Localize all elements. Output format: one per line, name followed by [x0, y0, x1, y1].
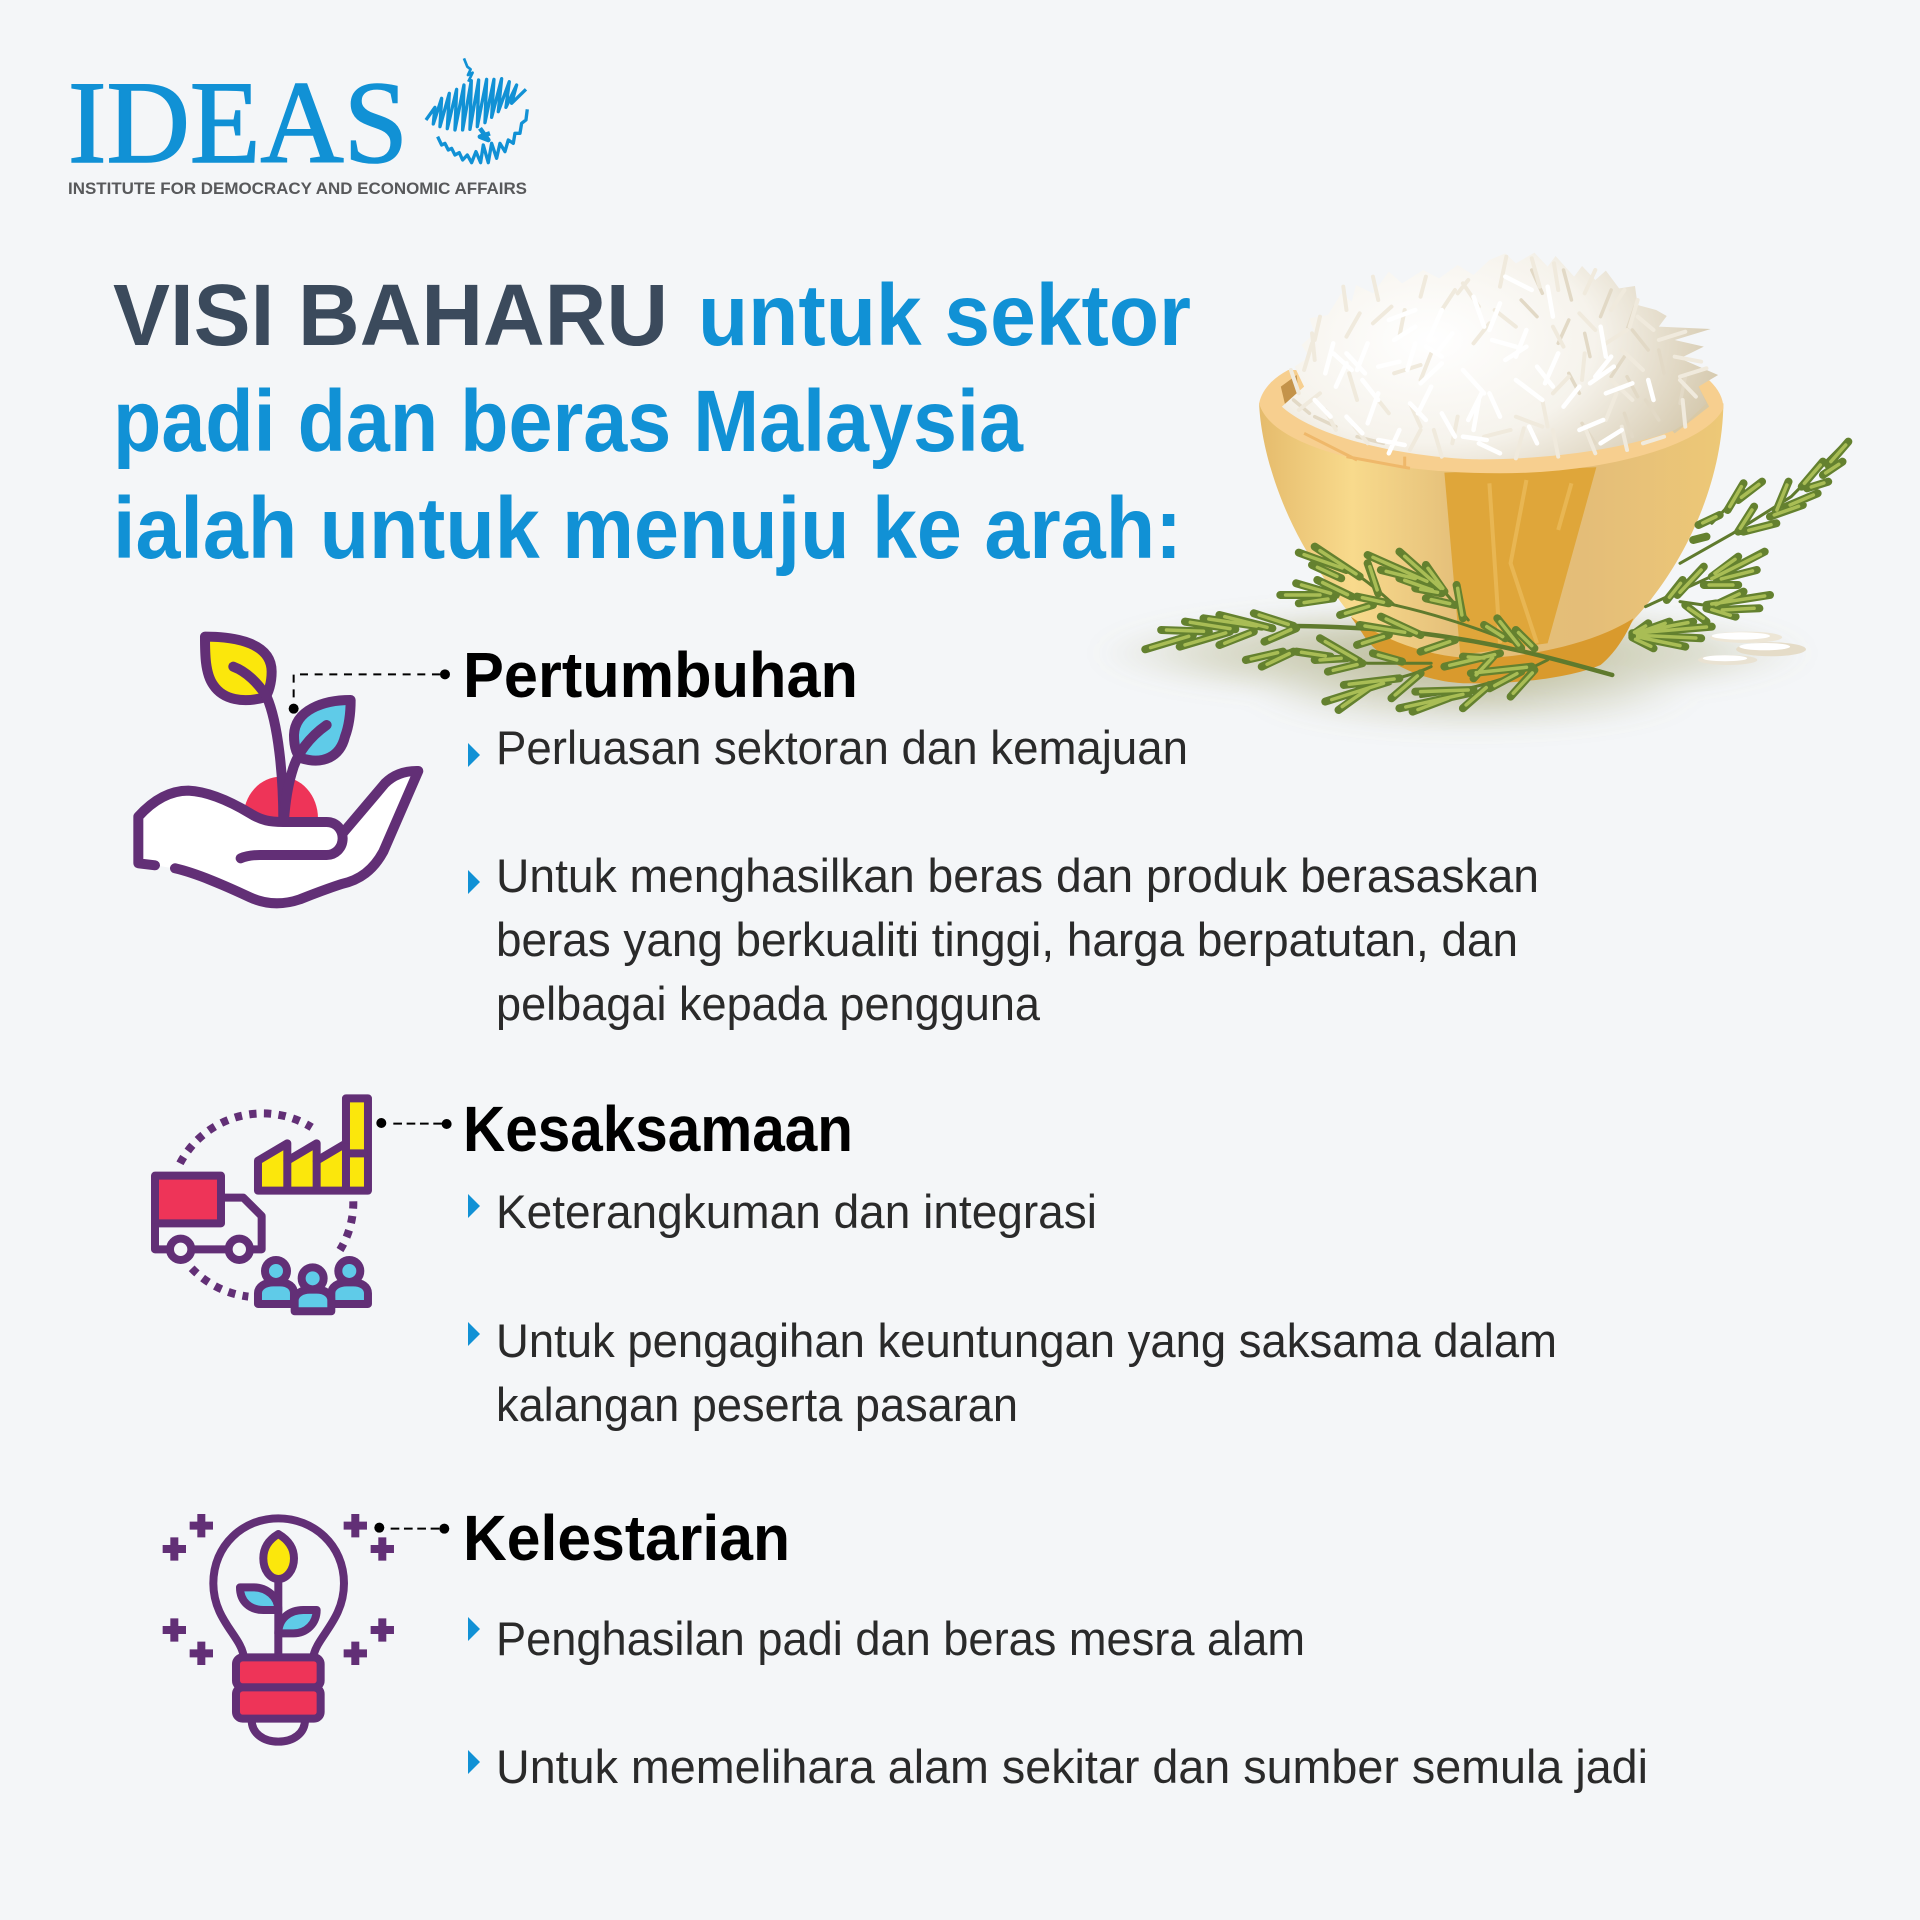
illustration: bowl of rice with paddy stalks	[1092, 253, 1848, 733]
bullet text: beras yang berkualiti tinggi, harga berpatutan, dan	[496, 913, 1518, 966]
bullet text: Keterangkuman dan integrasi	[496, 1185, 1097, 1238]
bullet text: Perluasan sektoran dan kemajuan	[496, 721, 1188, 774]
bullet text: Untuk memelihara alam sekitar dan sumber semula jadi	[496, 1740, 1648, 1793]
title: padi dan beras Malaysia	[113, 373, 1024, 470]
title: VISI BAHARU	[113, 267, 668, 364]
title: ialah untuk menuju ke arah:	[113, 480, 1182, 577]
logo: IDEAS	[68, 57, 527, 198]
icon: light bulb with plant	[163, 1514, 394, 1742]
bullet text: Untuk menghasilkan beras dan produk berasaskan	[496, 849, 1539, 902]
bullet text	[468, 1314, 1557, 1431]
bowl base	[1351, 617, 1633, 683]
logo wordmark: IDEAS	[68, 57, 408, 188]
icon: hand holding seedling	[138, 637, 418, 903]
connector	[374, 1523, 449, 1534]
ground shadow	[1092, 603, 1812, 733]
connector	[376, 1118, 452, 1129]
bullet text: Untuk pengagihan keuntungan yang saksama dalam	[496, 1314, 1557, 1367]
bullet text: Penghasilan padi dan beras mesra alam	[496, 1612, 1305, 1665]
paddy stems	[1246, 443, 1844, 697]
logo bird mark	[426, 58, 527, 163]
title: untuk sektor	[698, 267, 1191, 364]
rice mound	[1282, 253, 1718, 459]
bowl centre panel	[1444, 467, 1596, 655]
loose rice grains	[1698, 632, 1806, 665]
heading: Pertumbuhan	[463, 639, 858, 711]
heading: Kelestarian	[463, 1502, 790, 1574]
bullet text	[468, 849, 1539, 1030]
bowl rim	[1259, 370, 1723, 473]
section: Pertumbuhan	[138, 637, 1539, 1030]
paddy grains	[1145, 442, 1848, 712]
connector	[289, 669, 450, 714]
section: Kelestarian	[163, 1502, 1648, 1793]
title	[113, 267, 1191, 577]
bowl body	[1259, 403, 1723, 683]
logo tagline: INSTITUTE FOR DEMOCRACY AND ECONOMIC AFFAIRS	[68, 180, 527, 198]
bullet text: pelbagai kepada pengguna	[496, 977, 1041, 1030]
icon: supply chain	[155, 1098, 368, 1311]
bullet text: kalangan peserta pasaran	[496, 1378, 1018, 1431]
heading: Kesaksamaan	[463, 1093, 853, 1165]
rice grains	[1291, 257, 1706, 458]
section: Kesaksamaan	[155, 1093, 1557, 1431]
